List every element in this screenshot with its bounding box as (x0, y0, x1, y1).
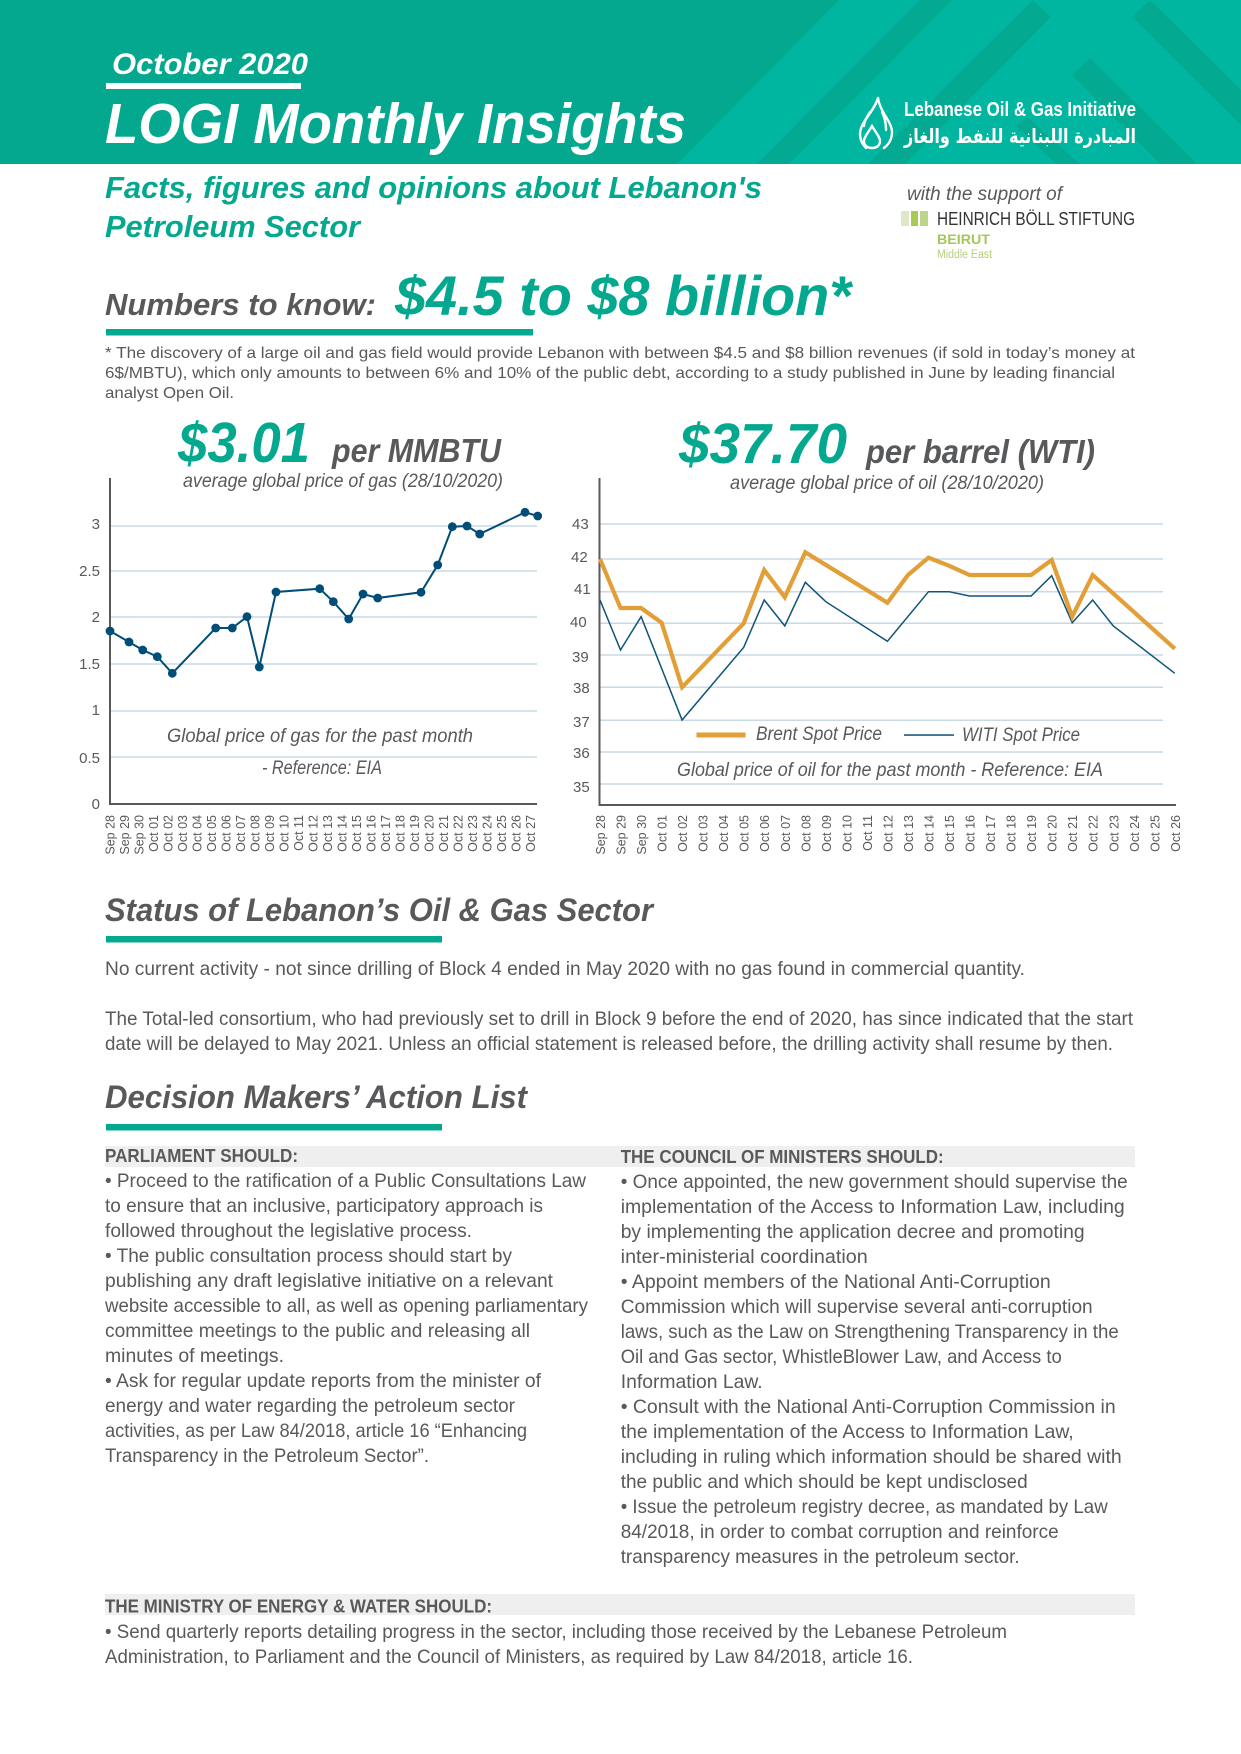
line chart: gas price: Oct 04 (190, 815, 204, 852)
oil price headline: average global price of oil (28/10/2020) (730, 473, 1044, 494)
gas chart caption (167, 726, 473, 779)
line chart: oil price: 38 (573, 680, 590, 697)
line chart: oil price: Oct 10 (840, 815, 854, 852)
line chart: gas price: Oct 25 (495, 815, 509, 852)
line chart: oil price: Oct 23 (1107, 815, 1121, 852)
line chart: gas price: Oct 02 (162, 815, 176, 852)
sponsor block: Heinrich Boll Stiftung: Middle East (937, 249, 993, 261)
line chart: oil price: Oct 11 (861, 815, 875, 851)
line chart: gas price: Oct 12 (306, 815, 320, 852)
panel: gas price (79, 411, 542, 855)
line chart: gas price: 0 (92, 796, 100, 813)
line chart: gas price: Oct 19 (408, 815, 422, 852)
line chart: oil price: Oct 01 (656, 815, 670, 852)
gas chart caption: - Reference: EIA (262, 758, 382, 779)
line chart: oil price: Oct 14 (922, 815, 936, 852)
line chart: oil price: Oct 26 (1169, 815, 1183, 852)
legend (696, 724, 1080, 746)
column: council of ministers: laws, such as the Law on Strengthening Transparency in the (621, 1321, 1119, 1343)
column: parliament: website accessible to all, as well as opening parliamentary (104, 1295, 588, 1317)
sponsor block: Heinrich Boll Stiftung: with the support of (907, 184, 1064, 205)
line chart: oil price: Oct 12 (881, 815, 895, 852)
column: council of ministers (621, 1147, 1128, 1568)
line chart: gas price: Oct 07 (234, 815, 248, 852)
line chart: oil price: Oct 09 (820, 815, 834, 852)
line chart: gas price: Oct 13 (321, 815, 335, 852)
footnote: * The discovery of a large oil and gas field would provide Lebanon with between $4.5 and $8 billion revenues (if sold in today’s money at (105, 345, 1136, 362)
line chart: oil price (570, 478, 1183, 855)
icon: LOGI droplet logo (860, 98, 892, 148)
action list heading (105, 1079, 528, 1130)
section: status of the sector (105, 892, 1134, 1055)
line chart: gas price: Oct 26 (510, 815, 524, 852)
line chart: gas price: Oct 11 (292, 815, 306, 851)
line chart: oil price: 40 (570, 614, 587, 631)
status body text: The Total-led consortium, who had previously set to drill in Block 9 before the end of 2020, has since indicated that the start (105, 1008, 1134, 1030)
line chart: oil price: Oct 03 (697, 815, 711, 852)
line chart: gas price: 0.5 (79, 750, 100, 767)
column: council of ministers: • Issue the petroleum registry decree, as mandated by Law (621, 1496, 1109, 1518)
gas price headline: average global price of gas (28/10/2020) (183, 471, 503, 492)
numbers to know heading: $4.5 to $8 billion* (394, 264, 853, 327)
line chart: gas price: Oct 20 (422, 815, 436, 852)
footnote (105, 345, 1136, 402)
column: parliament: Transparency in the Petroleum Sector”. (105, 1445, 429, 1467)
line chart: gas price: Oct 05 (205, 815, 219, 852)
line chart: oil price: Oct 07 (779, 815, 793, 852)
column: parliament: activities, as per Law 84/2018, article 16 “Enhancing (105, 1420, 527, 1442)
line chart: oil price: Oct 06 (758, 815, 772, 852)
column: council of ministers: Commission which will supervise several anti-corruption (621, 1296, 1093, 1318)
line chart: gas price: Sep 29 (118, 815, 132, 855)
line chart: gas price: Oct 22 (452, 815, 466, 852)
line chart: oil price: 41 (574, 581, 591, 598)
header banner (0, 0, 1241, 164)
line chart: gas price: Oct 09 (263, 815, 277, 852)
column: council of ministers: implementation of the Access to Information Law, including (621, 1196, 1125, 1218)
line chart: oil price: Oct 18 (1005, 815, 1019, 852)
column: council of ministers: including in ruling which information should be shared with (621, 1446, 1122, 1468)
status heading (105, 892, 654, 942)
numbers to know heading: Numbers to know: (105, 287, 376, 322)
line chart: oil price: 35 (573, 779, 590, 796)
line chart: oil price: 42 (571, 549, 588, 566)
column: parliament: committee meetings to the public and releasing all (105, 1320, 530, 1342)
subtitle: Facts, figures and opinions about Lebanon's (105, 170, 762, 205)
column: council of ministers: • Appoint members of the National Anti-Corruption (621, 1271, 1051, 1293)
sponsor block: Heinrich Boll Stiftung: BEIRUT (937, 231, 990, 247)
line chart: oil price: Oct 05 (738, 815, 752, 852)
line chart: oil price: Oct 22 (1087, 815, 1101, 852)
legend: Brent Spot Price (756, 724, 882, 745)
line chart: oil price: Oct 17 (984, 815, 998, 852)
column: council of ministers: inter-ministerial coordination (621, 1246, 868, 1268)
oil price headline: $37.70 (678, 412, 847, 476)
column: council of ministers: by implementing the application decree and promoting (621, 1221, 1085, 1243)
column: parliament: to ensure that an inclusive, participatory approach is (105, 1195, 543, 1217)
column: parliament: • The public consultation process should start by (105, 1245, 512, 1267)
line chart: oil price: Oct 16 (964, 815, 978, 852)
line chart: oil price: 37 (573, 714, 590, 731)
column: parliament: minutes of meetings. (105, 1345, 284, 1367)
block: ministry of energy and water: • Send quarterly reports detailing progress in the sector, including those received by the Lebanese Petroleum (105, 1621, 1007, 1643)
organisation name Arabic: المبادرة اللبنانية للنفط والغاز (903, 124, 1136, 148)
sponsor block: Heinrich Boll Stiftung (901, 184, 1135, 261)
organisation name English: Lebanese Oil & Gas Initiative (904, 99, 1136, 121)
subtitle: Petroleum Sector (105, 209, 362, 244)
line chart: gas price: Oct 18 (394, 815, 408, 852)
line chart: oil price: Oct 21 (1066, 815, 1080, 852)
column: council of ministers: Oil and Gas sector, WhistleBlower Law, and Access to (621, 1346, 1062, 1368)
line chart: gas price: Oct 03 (176, 815, 190, 852)
line chart: gas price: Oct 06 (220, 815, 234, 852)
line chart: oil price: Oct 15 (943, 815, 957, 852)
line chart: gas price: Oct 23 (466, 815, 480, 852)
column: parliament: publishing any draft legislative initiative on a relevant (105, 1270, 554, 1292)
line chart: gas price: Sep 28 (104, 815, 118, 855)
gas price headline: $3.01 (177, 411, 310, 475)
WTI line (600, 576, 1175, 720)
column: parliament: followed throughout the legislative process. (105, 1220, 472, 1242)
column: parliament: • Proceed to the ratification of a Public Consultations Law (105, 1170, 587, 1192)
block: ministry of energy and water (105, 1594, 1135, 1668)
status body text (105, 958, 1134, 1055)
column: council of ministers: • Consult with the National Anti-Corruption Commission in (621, 1396, 1116, 1418)
column: council of ministers: 84/2018, in order to combat corruption and reinforce (621, 1521, 1059, 1543)
gas chart caption: Global price of gas for the past month (167, 726, 473, 747)
date label: October 2020 (112, 48, 308, 81)
line chart: oil price: Sep 30 (635, 815, 649, 855)
line chart: oil price: 36 (573, 745, 590, 762)
line chart: gas price: 3 (92, 516, 100, 533)
line chart: gas price: Oct 08 (248, 815, 262, 852)
footnote: 6$/MBTU), which only amounts to between 6% and 10% of the public debt, according to a study published in June by leading financial (105, 365, 1115, 382)
column: council of ministers: the public and which should be kept undisclosed (621, 1471, 1028, 1493)
line chart: gas price: Oct 14 (336, 815, 350, 852)
line chart: gas price: 2.5 (79, 563, 100, 580)
line chart: gas price: Oct 16 (364, 815, 378, 852)
column: council of ministers: • Once appointed, the new government should supervise the (621, 1171, 1128, 1193)
column: parliament: energy and water regarding the petroleum sector (105, 1395, 515, 1417)
gas price headline (177, 411, 503, 492)
icon: sponsor squares (901, 211, 928, 226)
line chart: gas price: Oct 15 (350, 815, 364, 852)
line chart: oil price: Oct 08 (799, 815, 813, 852)
line chart: gas price: 1 (92, 702, 100, 719)
panel: oil price (570, 412, 1183, 855)
block: ministry of energy and water: Administration, to Parliament and the Council of Ministers, as required by Law 84/2018, article 16. (105, 1646, 913, 1668)
oil price headline (678, 412, 1095, 494)
line chart: gas price: Sep 30 (132, 815, 146, 855)
line chart: gas price: Oct 17 (379, 815, 393, 852)
line chart: gas price: 2 (92, 609, 100, 626)
main title: LOGI Monthly Insights (105, 92, 686, 156)
subtitle (105, 170, 762, 244)
block: ministry of energy and water: THE MINISTRY OF ENERGY & WATER SHOULD: (105, 1596, 492, 1616)
line chart: oil price: 43 (572, 516, 589, 533)
line chart: gas price (79, 478, 542, 855)
sponsor block: Heinrich Boll Stiftung: HEINRICH BÖLL STIFTUNG (937, 209, 1135, 229)
column: council of ministers: Information Law. (621, 1371, 763, 1393)
Brent line (600, 552, 1175, 687)
gas price headline: per MMBTU (331, 432, 502, 469)
line chart: oil price: Oct 04 (717, 815, 731, 852)
column: council of ministers: THE COUNCIL OF MINISTERS SHOULD: (621, 1147, 944, 1167)
line chart: oil price: Oct 25 (1148, 815, 1162, 852)
line chart: gas price: Oct 10 (278, 815, 292, 852)
date underline (106, 83, 301, 89)
oil chart caption: Global price of oil for the past month - Reference: EIA (677, 760, 1103, 781)
status body text: date will be delayed to May 2021. Unless an official statement is released before, the drilling activity shall resume by then. (105, 1033, 1113, 1055)
line chart: oil price: Oct 19 (1025, 815, 1039, 852)
line chart: gas price: Oct 27 (524, 815, 538, 852)
line chart: oil price: Oct 24 (1128, 815, 1142, 852)
oil price headline: per barrel (WTI) (865, 433, 1095, 470)
action list heading: Decision Makers’ Action List (105, 1079, 528, 1115)
legend: WITI Spot Price (962, 725, 1080, 746)
line chart: oil price: 39 (572, 649, 589, 666)
line chart: oil price: Oct 20 (1046, 815, 1060, 852)
column: parliament (104, 1146, 588, 1467)
numbers to know heading (105, 264, 853, 336)
status heading: Status of Lebanon’s Oil & Gas Sector (105, 892, 654, 928)
footnote: analyst Open Oil. (105, 385, 234, 402)
section: decision makers' action list (104, 1079, 1135, 1668)
line chart: oil price: Oct 13 (902, 815, 916, 852)
line chart: gas price: Oct 24 (480, 815, 494, 852)
line chart: oil price: Sep 29 (614, 815, 628, 855)
status body text: No current activity - not since drilling of Block 4 ended in May 2020 with no gas found in commercial quantity. (105, 958, 1025, 980)
line chart: oil price: Sep 28 (594, 815, 608, 855)
column: parliament: PARLIAMENT SHOULD: (105, 1146, 298, 1166)
column: parliament: • Ask for regular update reports from the minister of (105, 1370, 542, 1392)
column: council of ministers: transparency measures in the petroleum sector. (621, 1546, 1020, 1568)
grey heading band (105, 1146, 1135, 1167)
line chart: oil price: Oct 02 (676, 815, 690, 852)
line chart: gas price: Oct 21 (437, 815, 451, 852)
line chart: gas price: Oct 01 (147, 815, 161, 852)
line chart: gas price: 1.5 (79, 656, 100, 673)
column: council of ministers: the implementation of the Access to Information Law, (621, 1421, 1074, 1443)
